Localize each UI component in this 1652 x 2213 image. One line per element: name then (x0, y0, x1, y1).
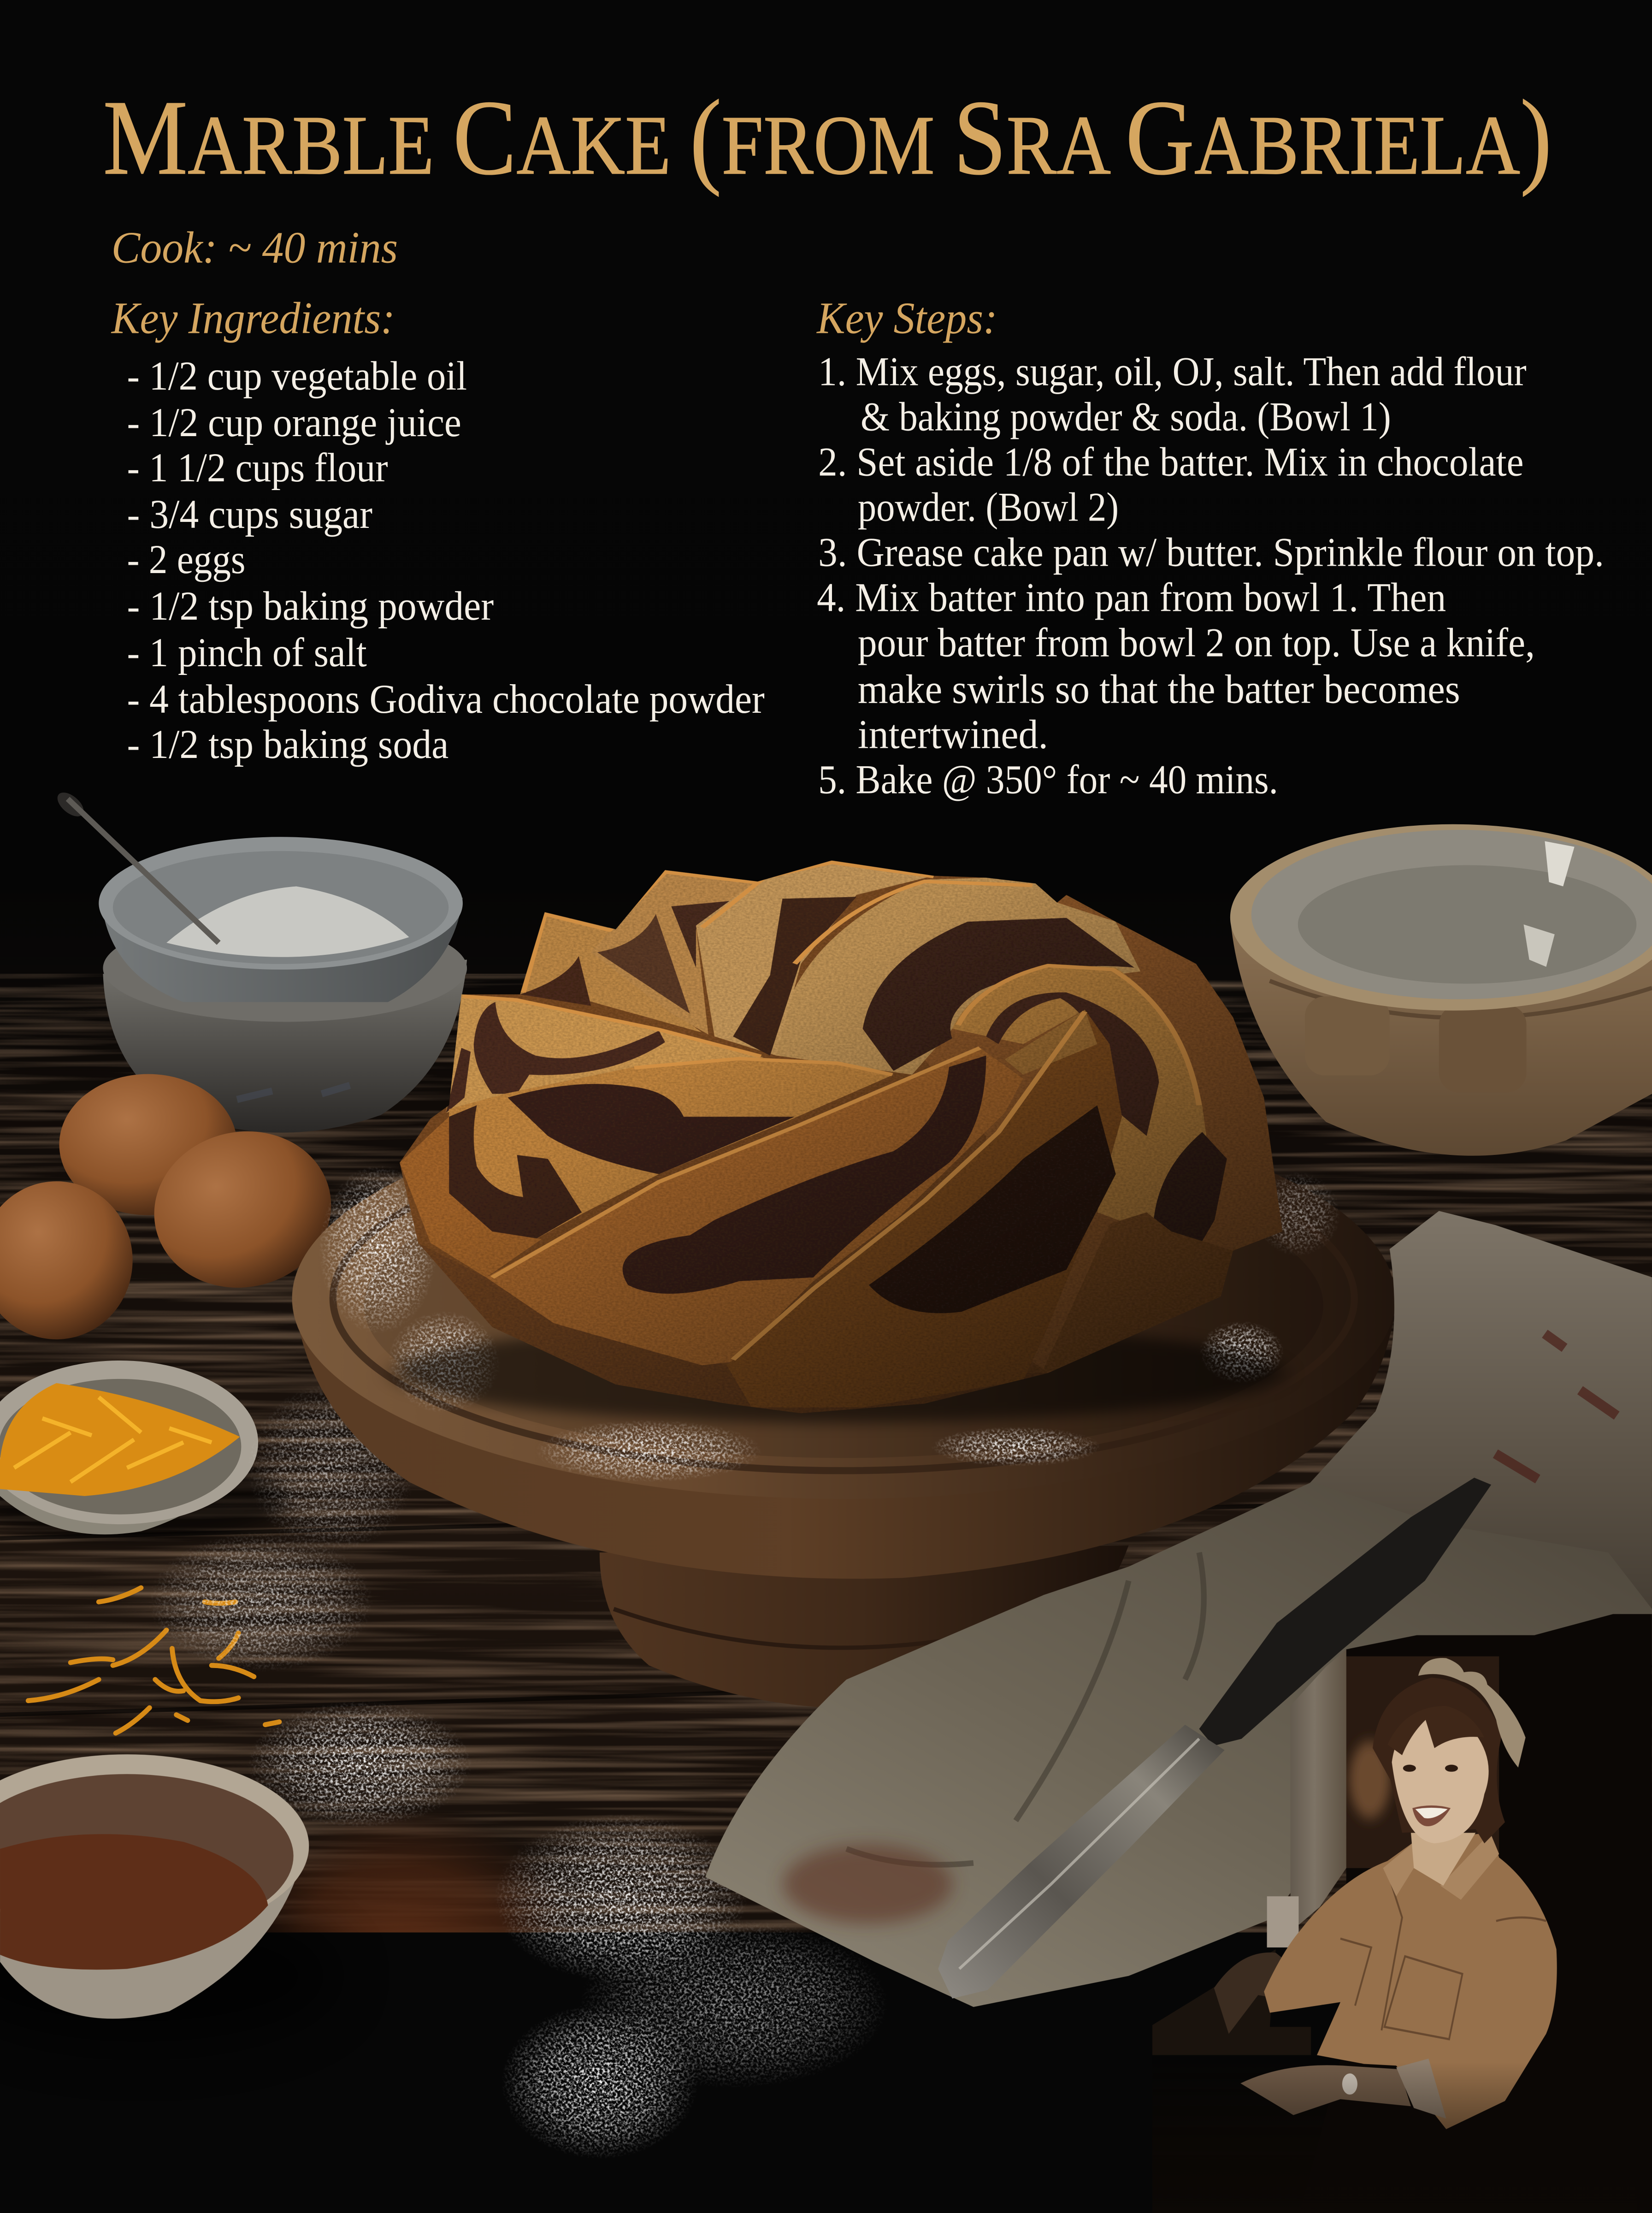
lowest left slice (400, 1117, 542, 1278)
inner ring slice (952, 964, 1227, 1262)
steps list: intertwined. (858, 712, 1048, 757)
shirt collar (1383, 1833, 1499, 1900)
ingredients list: - 1/2 tsp baking powder (127, 584, 494, 629)
spoon in flour bowl (53, 788, 218, 943)
ingredients list: - 4 tablespoons Godiva chocolate powder (127, 677, 765, 722)
scrunchie (1418, 1658, 1526, 1768)
stacked bowls with flour (68, 799, 467, 1133)
ingredients list: - 1/2 tsp baking soda (127, 722, 448, 767)
steps list: powder. (Bowl 2) (858, 485, 1119, 530)
ingredients list: - 2 eggs (127, 537, 246, 582)
woman's face (1392, 1719, 1489, 1843)
cocoa powder spill (226, 1806, 987, 2138)
flour dusting on table (148, 1383, 889, 2160)
steps list: 3. Grease cake pan w/ butter. Sprinkle flour on top. (818, 530, 1604, 575)
bottom fade (1152, 2062, 1637, 2210)
bowl of cocoa powder (0, 1754, 339, 2047)
title: MARBLE CAKE (FROM SRA GABRIELA) (103, 79, 1552, 197)
fringe (1387, 1706, 1484, 1755)
ingredients list: - 1/2 cup orange juice (127, 400, 461, 445)
ingredients list: - 3/4 cups sugar (127, 492, 372, 537)
bowl of orange zest (0, 1361, 289, 1541)
eggs (0, 1074, 346, 1339)
ingredients list (127, 354, 765, 767)
front linen cloth (705, 1482, 1652, 2007)
crust highlight edges (463, 863, 1199, 1360)
shirt folds and pockets (1340, 1871, 1546, 2039)
cake stand pedestal (600, 1545, 1129, 1708)
woman's arm (1214, 1953, 1293, 2034)
portrait backdrop (1152, 1614, 1652, 2213)
steps list: 4. Mix batter into pan from bowl 1. Then (817, 575, 1446, 621)
marble bundt cake (369, 849, 1307, 1423)
right linen cloth (1298, 1211, 1652, 1651)
inner back slice with chocolate swirl (776, 878, 1140, 1075)
woman's neck (1411, 1833, 1475, 1886)
steps list: 1. Mix eggs, sugar, oil, OJ, salt. Then add flour (818, 349, 1527, 395)
cake stand plate (292, 1098, 1397, 1579)
steps list: 2. Set aside 1/8 of the batter. Mix in chocolate (818, 440, 1523, 485)
steps list: pour batter from bowl 2 on top. Use a knife, (858, 620, 1535, 665)
front large slice (486, 1048, 1023, 1365)
front second slice (727, 1010, 1122, 1408)
knife (938, 1478, 1491, 1999)
cook time: Cook: ~ 40 mins (112, 223, 398, 272)
ingredients list: - 1/2 cup vegetable oil (127, 354, 467, 399)
crust base (418, 1243, 1048, 1413)
right mixing bowl (1230, 824, 1652, 1156)
middle left slice (449, 1058, 893, 1239)
steps list: make swirls so that the batter becomes (858, 667, 1460, 712)
steps list (817, 349, 1604, 802)
woman's forearm and watch (1240, 2065, 1411, 2115)
back left slices (520, 860, 934, 1055)
portrait of Sra Gabriela (1152, 1614, 1652, 2213)
eyes (1403, 1765, 1458, 1772)
steps list: 5. Bake @ 350° for ~ 40 mins. (818, 757, 1278, 802)
flour on the plate (319, 1165, 1340, 1482)
upper left slice (446, 994, 764, 1113)
ingredients list: - 1 pinch of salt (127, 630, 367, 675)
woman's shirt (1264, 1833, 1557, 2129)
right front slice (1042, 1213, 1233, 1373)
key ingredients heading: Key Ingredients: (111, 293, 395, 343)
ingredients list: - 1 1/2 cups flour (127, 445, 388, 491)
smile (1412, 1805, 1451, 1826)
back right outer ring (924, 878, 1282, 1373)
steps list: & baking powder & soda. (Bowl 1) (861, 395, 1391, 440)
key steps heading: Key Steps: (816, 293, 997, 343)
woman's hair (1373, 1678, 1505, 1843)
scattered orange zest (28, 1588, 279, 1733)
